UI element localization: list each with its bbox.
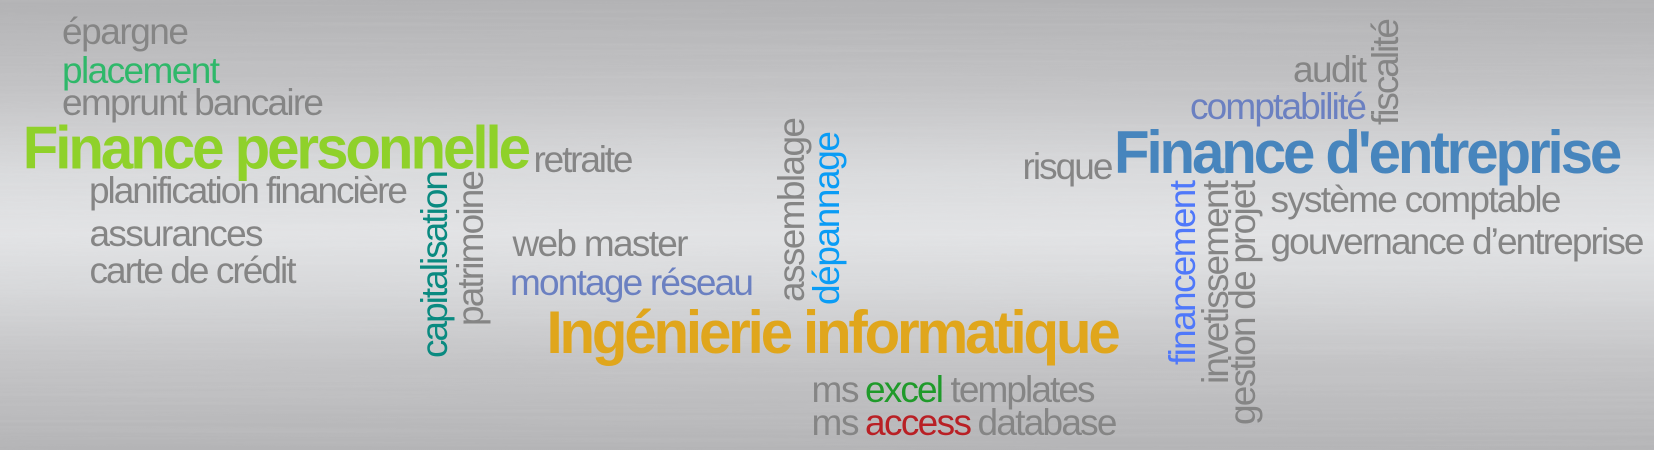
word: retraite: retraite xyxy=(534,139,634,180)
heading: Finance personnelle: Finance personnelle xyxy=(23,114,531,182)
word: planification financière: planification financière xyxy=(89,170,408,211)
vertical word: patrimoine: patrimoine xyxy=(450,170,491,326)
word: épargne: épargne xyxy=(62,11,189,52)
word: montage réseau: montage réseau xyxy=(510,262,754,303)
word: risque: risque xyxy=(1022,146,1114,187)
vertical word: invetissement: invetissement xyxy=(1195,179,1236,384)
word: gouvernance d'entreprise: gouvernance d’entreprise xyxy=(1270,221,1644,262)
word: ms (excel line): ms xyxy=(812,369,860,410)
word: access: access xyxy=(865,402,972,443)
word: assurances: assurances xyxy=(90,213,264,254)
heading: Finance d'entreprise: Finance d'entreprise xyxy=(1114,118,1622,186)
cluster: Ingénierie informatique xyxy=(510,117,1121,443)
word: carte de crédit: carte de crédit xyxy=(90,250,297,291)
word: système comptable: système comptable xyxy=(1270,179,1562,220)
word: audit: audit xyxy=(1293,49,1368,90)
vertical word: assemblage: assemblage xyxy=(771,117,812,302)
word: templates: templates xyxy=(950,369,1096,410)
word: database: database xyxy=(978,402,1118,443)
vertical word: dépannage: dépannage xyxy=(806,131,847,305)
word: ms (access line): ms xyxy=(812,402,860,443)
heading: Ingénierie informatique: Ingénierie informatique xyxy=(546,298,1121,366)
cluster: Finance personnelle xyxy=(23,11,633,358)
vertical word: gestion de projet: gestion de projet xyxy=(1222,179,1263,425)
vertical word: capitalisation: capitalisation xyxy=(414,170,455,358)
cluster: Finance d'entreprise xyxy=(1022,18,1644,425)
word: placement: placement xyxy=(62,50,221,91)
word: emprunt bancaire: emprunt bancaire xyxy=(62,82,324,123)
vertical word: fiscalité: fiscalité xyxy=(1365,18,1406,125)
word: comptabilité: comptabilité xyxy=(1190,86,1367,127)
word: excel: excel xyxy=(865,369,944,410)
vertical word: financement: financement xyxy=(1162,179,1203,365)
word: web master: web master xyxy=(512,223,688,264)
